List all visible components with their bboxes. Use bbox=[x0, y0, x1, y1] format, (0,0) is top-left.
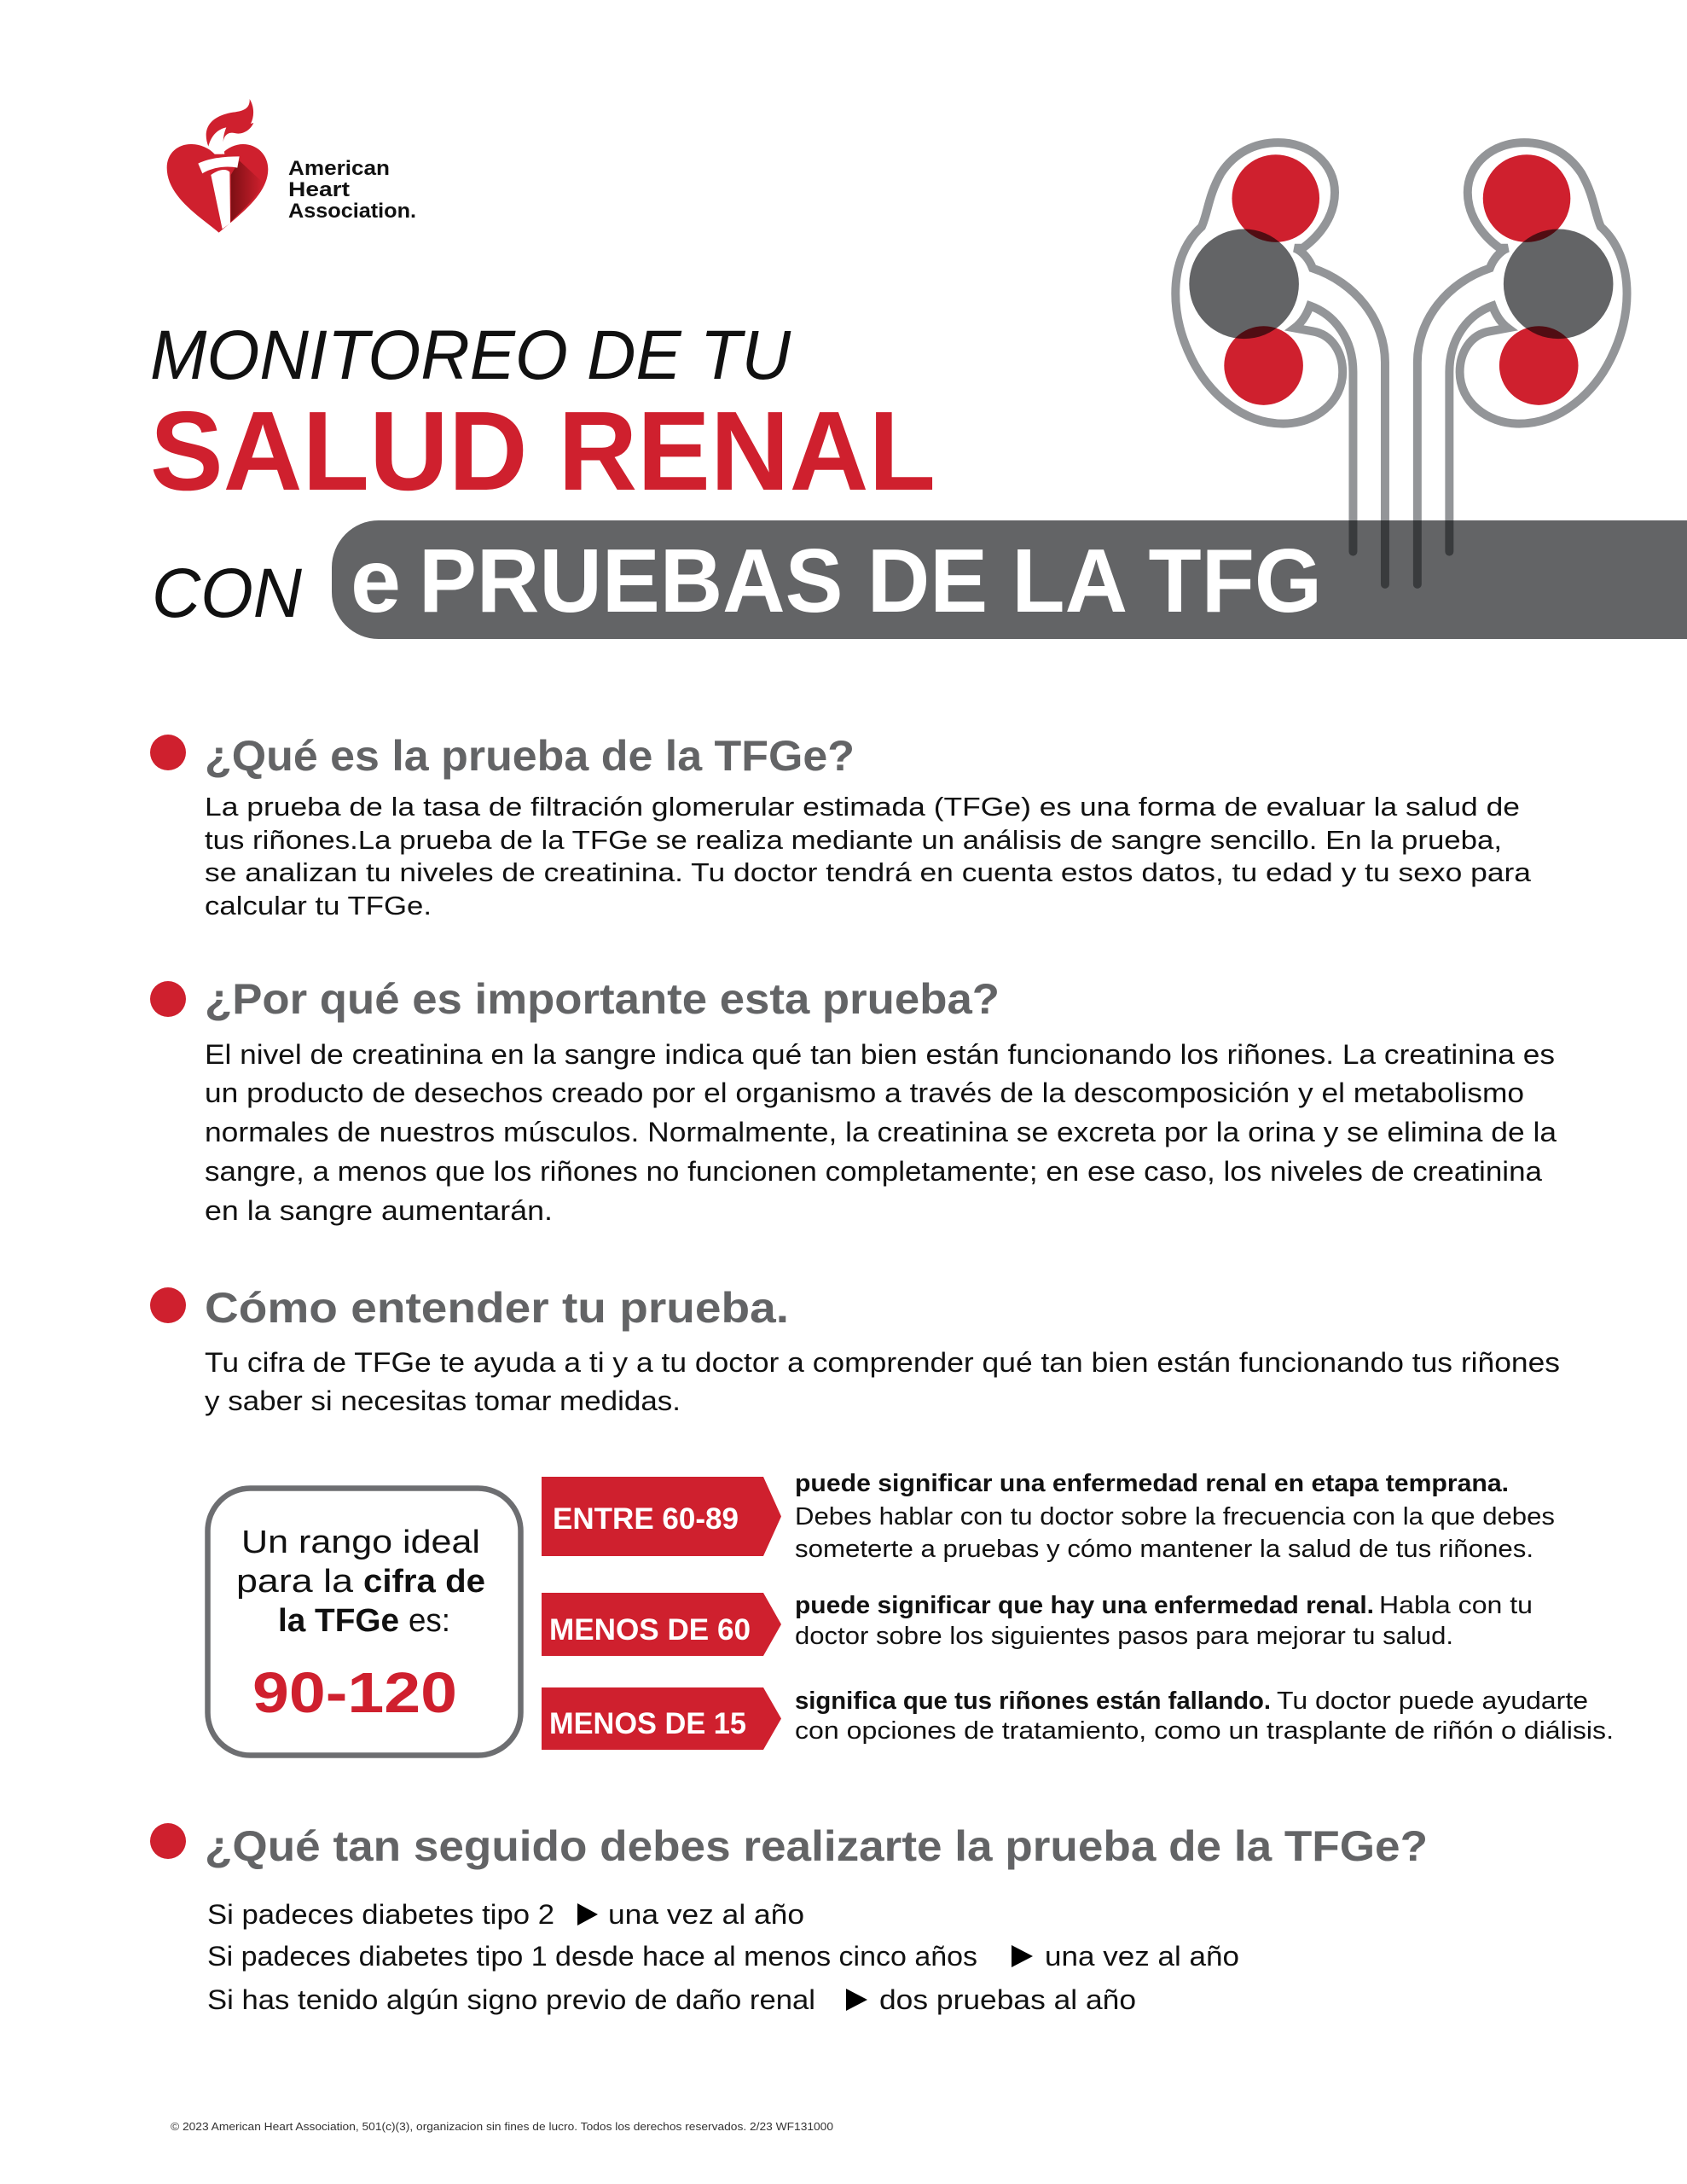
section: how often to test: una vez al año bbox=[608, 1899, 804, 1930]
title: SALUD RENAL bbox=[150, 388, 936, 514]
range row: under 60 bbox=[542, 1592, 1533, 1656]
panel: ideal range bbox=[208, 1488, 520, 1756]
title bbox=[150, 317, 1322, 632]
section: understanding your test: y saber si necesitas tomar medidas. bbox=[205, 1385, 681, 1416]
section: how often to test: ¿Qué tan seguido debes realizarte la prueba de la TFGe? bbox=[205, 1822, 1428, 1870]
section: why this test matters: El nivel de creatinina en la sangre indica qué tan bien están funcionando los riñones. La creatinina es bbox=[205, 1039, 1555, 1070]
range row: under 15: significa que tus riñones están fallando. bbox=[795, 1687, 1271, 1715]
section: how often to test: Si has tenido algún signo previo de daño renal bbox=[207, 1984, 815, 2015]
section: why this test matters: un producto de desechos creado por el organismo a través de la descomposición y el metabolismo bbox=[205, 1077, 1524, 1108]
section: why this test matters: sangre, a menos que los riñones no funcionen completamente; en ese caso, los niveles de creatinina bbox=[205, 1156, 1542, 1187]
icon: pair of kidneys bbox=[1175, 142, 1627, 584]
section: how often to test: una vez al año bbox=[1045, 1941, 1239, 1972]
section: how often to test: Si padeces diabetes tipo 1 desde hace al menos cinco años bbox=[207, 1941, 977, 1972]
section: what is the eGFR test: ¿Qué es la prueba de la TFGe? bbox=[205, 732, 855, 780]
icon: American Heart Association logo: Association. bbox=[288, 200, 416, 223]
range row: 60 to 89: Debes hablar con tu doctor sobre la frecuencia con la que debes bbox=[795, 1503, 1555, 1531]
range row: 60 to 89: ENTRE 60-89 bbox=[553, 1502, 739, 1536]
range row: 60 to 89: puede significar una enfermedad renal en etapa temprana. bbox=[795, 1470, 1509, 1497]
panel: ideal range: la TFGe bbox=[278, 1603, 399, 1639]
title: PRUEBAS DE LA TFG bbox=[419, 531, 1322, 631]
range row: under 15: Tu doctor puede ayudarte bbox=[1277, 1687, 1588, 1715]
title: CON bbox=[152, 555, 303, 632]
section: how often to test bbox=[150, 1822, 1428, 2015]
range row: under 15: con opciones de tratamiento, como un trasplante de riñón o diálisis. bbox=[795, 1717, 1614, 1745]
section: what is the eGFR test bbox=[150, 732, 1532, 921]
section: what is the eGFR test: tus riñones.La prueba de la TFGe se realiza mediante un análisis de sangre sencillo. En la prueba, bbox=[205, 825, 1502, 855]
range row: under 60: doctor sobre los siguientes pasos para mejorar tu salud. bbox=[795, 1623, 1453, 1650]
panel: ideal range: Un rango ideal bbox=[241, 1525, 480, 1560]
panel: ideal range: es: bbox=[409, 1603, 450, 1639]
icon: American Heart Association logo bbox=[167, 99, 416, 233]
title: e bbox=[351, 531, 401, 631]
panel: ideal range: para la bbox=[236, 1564, 354, 1600]
range row: 60 to 89: someterte a pruebas y cómo mantener la salud de tus riñones. bbox=[795, 1536, 1533, 1563]
section: what is the eGFR test: se analizan tu niveles de creatinina. Tu doctor tendrá en cuenta estos datos, tu edad y tu sexo para bbox=[205, 857, 1532, 887]
section: why this test matters: en la sangre aumentarán. bbox=[205, 1195, 553, 1226]
header banner: grey bar bbox=[332, 520, 1687, 639]
section: why this test matters: normales de nuestros músculos. Normalmente, la creatinina se excreta por la orina y se elimina de la bbox=[205, 1117, 1557, 1147]
range row: under 15: MENOS DE 15 bbox=[549, 1707, 746, 1740]
section: what is the eGFR test: La prueba de la tasa de filtración glomerular estimada (TFGe) es una forma de evaluar la salud de bbox=[205, 792, 1520, 822]
range row: under 60: puede significar que hay una enfermedad renal. bbox=[795, 1592, 1374, 1619]
section: understanding your test bbox=[150, 1284, 1560, 1416]
footer copyright: © 2023 American Heart Association, 501(c)(3), organizacion sin fines de lucro. Todos los derechos reservados. 2/23 WF131000 bbox=[171, 2120, 833, 2133]
section: understanding your test: Cómo entender tu prueba. bbox=[205, 1284, 789, 1332]
section: why this test matters: ¿Por qué es importante esta prueba? bbox=[205, 975, 1000, 1023]
range row: under 15 bbox=[542, 1687, 1614, 1750]
section: understanding your test: Tu cifra de TFGe te ayuda a ti y a tu doctor a comprender qué tan bien están funcionando tus riñones bbox=[205, 1347, 1560, 1378]
icon: American Heart Association logo: Heart bbox=[288, 178, 350, 201]
panel: ideal range: cifra de bbox=[363, 1564, 485, 1600]
range row: under 60: MENOS DE 60 bbox=[549, 1613, 751, 1647]
panel: ideal range: 90-120 bbox=[252, 1661, 457, 1725]
range row: 60 to 89 bbox=[542, 1470, 1555, 1563]
title: MONITOREO DE TU bbox=[150, 317, 791, 394]
section: how often to test: dos pruebas al año bbox=[879, 1984, 1136, 2015]
section: what is the eGFR test: calcular tu TFGe. bbox=[205, 891, 432, 921]
section: how often to test: Si padeces diabetes tipo 2 bbox=[207, 1899, 554, 1930]
range row: under 60: Habla con tu bbox=[1379, 1592, 1533, 1619]
section: why this test matters bbox=[150, 975, 1557, 1226]
icon: American Heart Association logo: American bbox=[288, 157, 390, 180]
